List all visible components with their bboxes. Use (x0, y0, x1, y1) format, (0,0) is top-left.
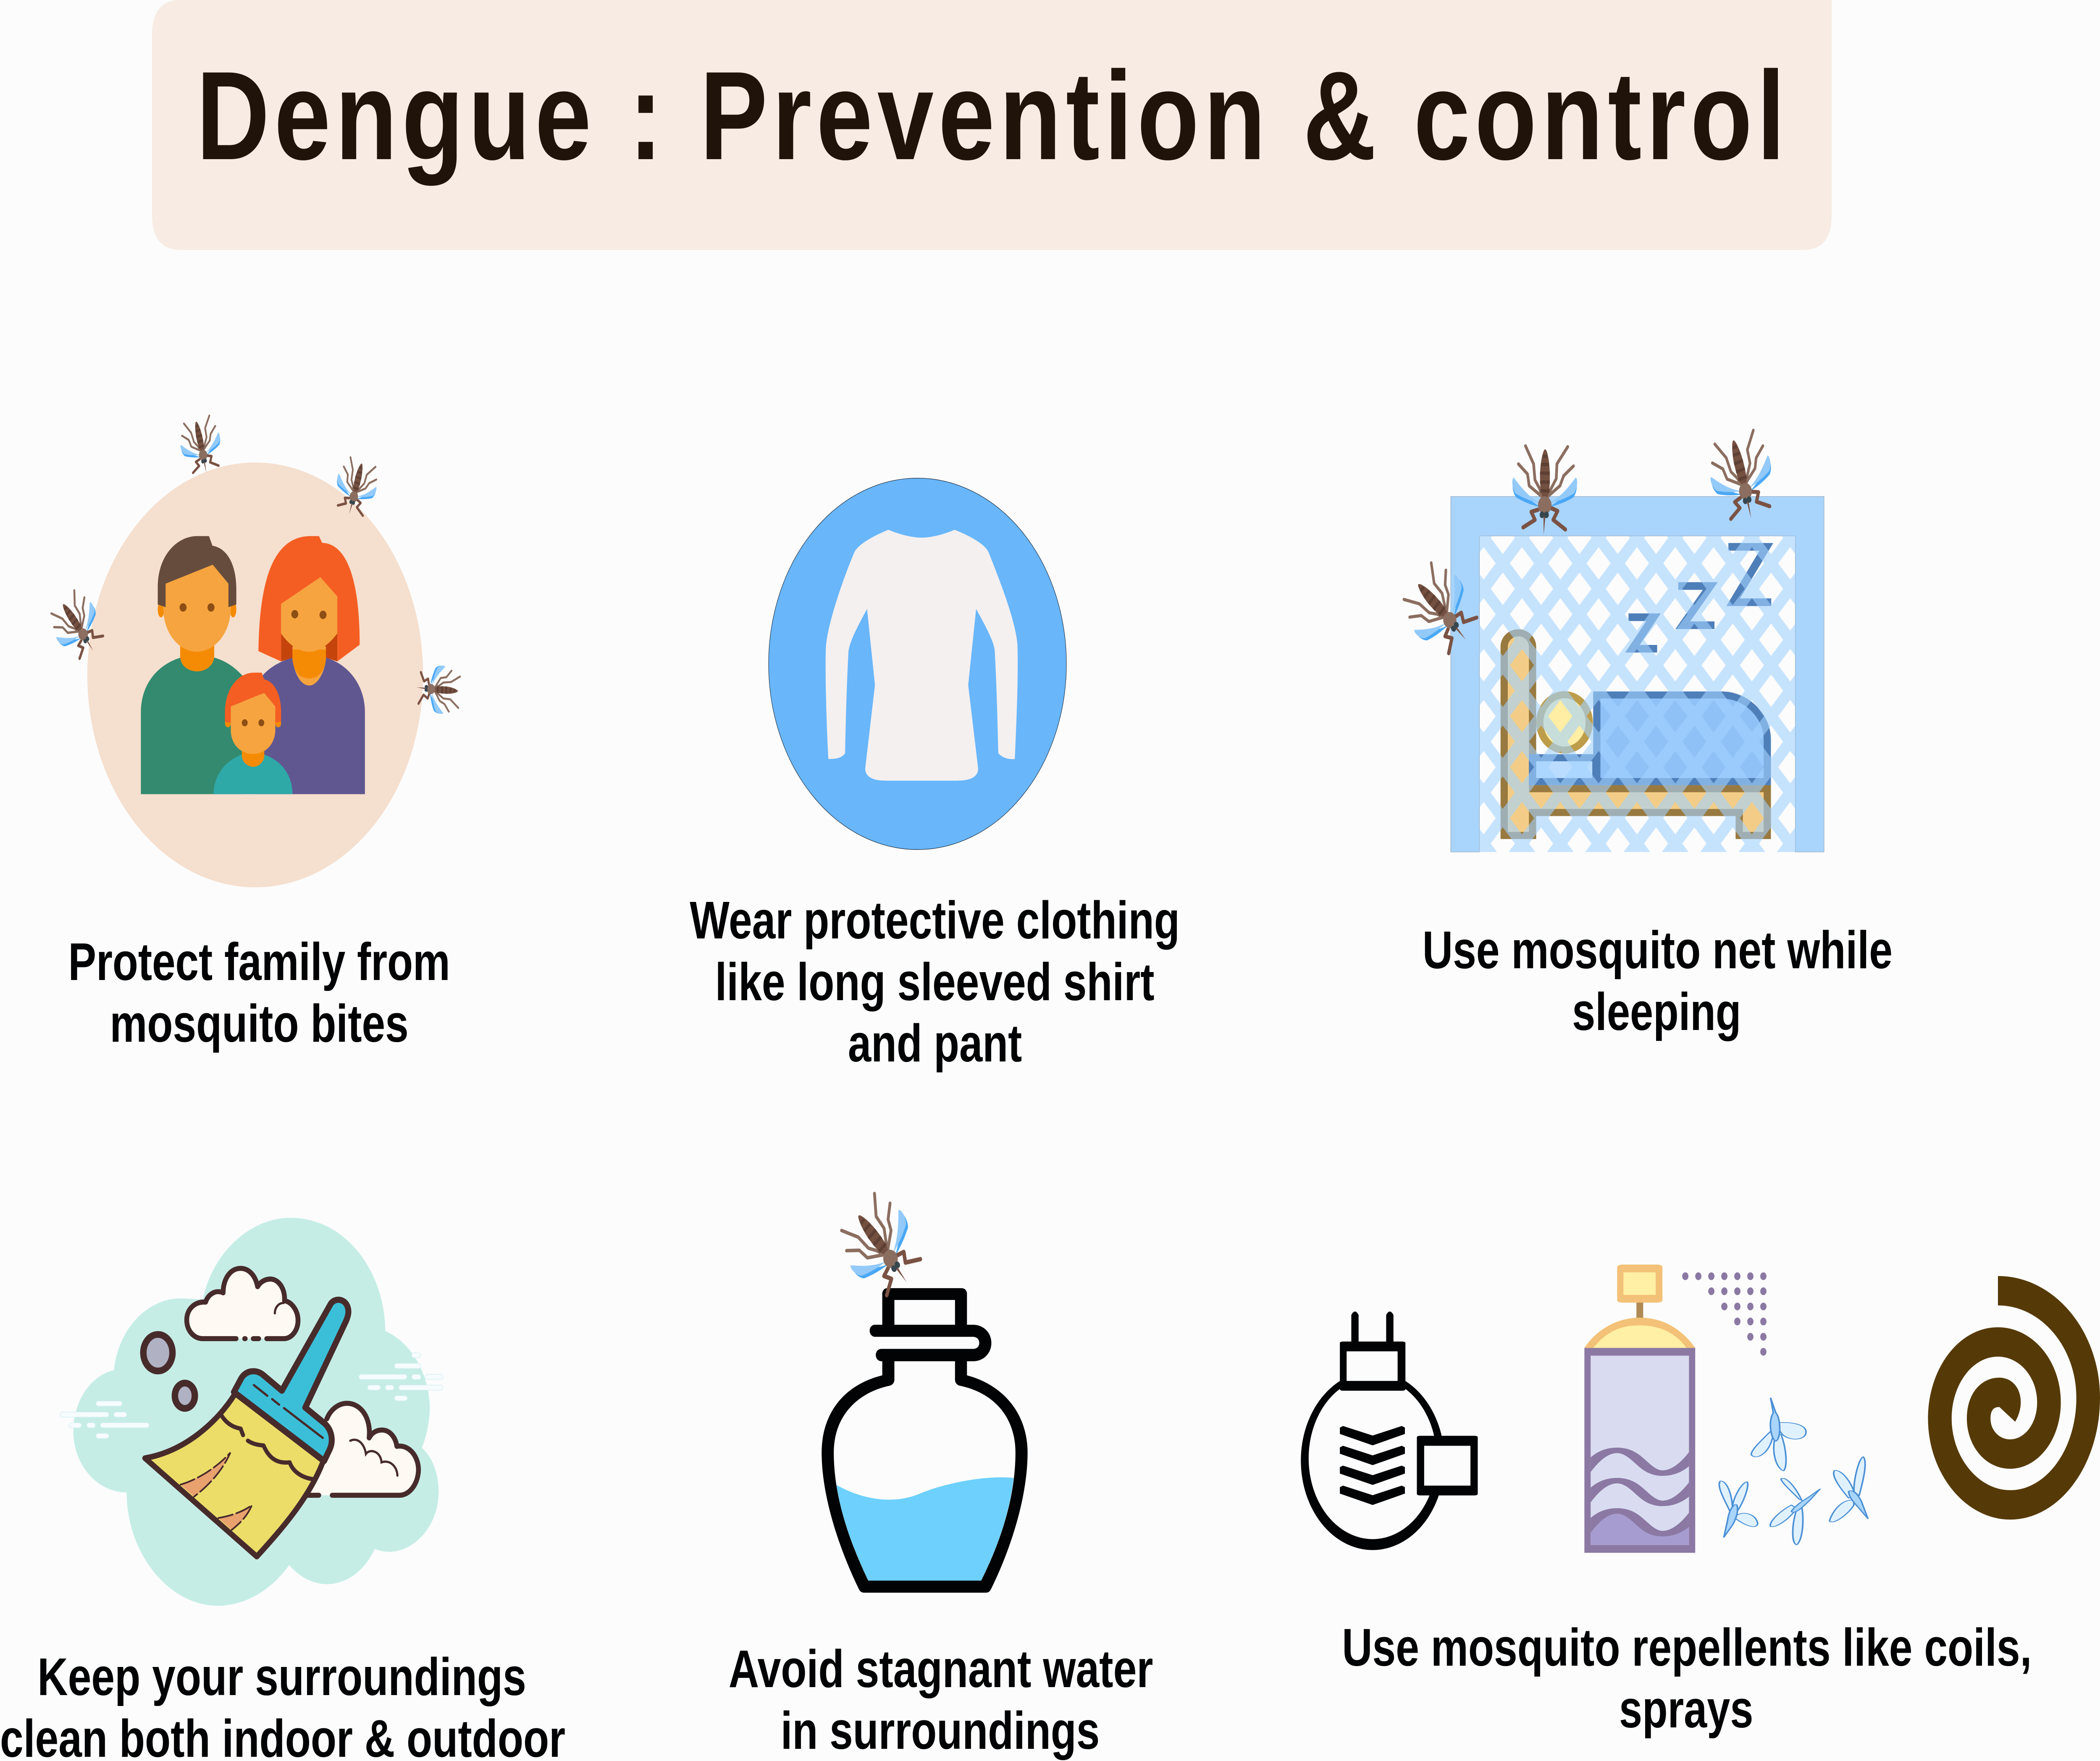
icon: mosquito coil (1940, 1291, 2088, 1505)
icon: mosquito right (416, 664, 460, 715)
icon: water bottle (822, 1288, 1028, 1593)
panel: clean surroundings (0, 1218, 565, 1761)
caption: mosquito net: sleeping (1572, 983, 1741, 1042)
caption: protective clothing: Wear protective clothing (690, 891, 1180, 950)
icon: family (87, 463, 423, 887)
icon: dead mosquitoes (1719, 1398, 1868, 1545)
caption: protective clothing: like long sleeved shirt (715, 953, 1155, 1012)
icon: mosquito on net left (1396, 554, 1487, 667)
caption: mosquito net: Use mosquito net while (1423, 921, 1893, 980)
caption: protective clothing (690, 891, 1180, 1073)
caption: protect family: mosquito bites (110, 994, 409, 1053)
icon: long sleeved shirt (769, 478, 1066, 849)
icon: mosquito on net top (1512, 446, 1577, 535)
title: Dengue : Prevention & control (196, 45, 1785, 187)
panel: protect family (44, 413, 460, 1053)
caption: protective clothing: and pant (848, 1014, 1022, 1073)
title background (152, 0, 1832, 250)
icon: mosquito left (44, 584, 111, 668)
icon: mosquito top right (331, 455, 381, 521)
icon: spray can (1583, 1265, 1695, 1553)
icon: mosquito on net right (1703, 426, 1782, 529)
caption: stagnant water (729, 1640, 1153, 1761)
panel: mosquito net (1396, 426, 1893, 1042)
caption: repellents: sprays (1619, 1680, 1753, 1739)
caption: repellents (1342, 1618, 2032, 1739)
title banner (152, 0, 1832, 250)
caption: protect family (68, 933, 450, 1053)
caption: clean surroundings (0, 1648, 565, 1761)
icon: broom and clouds (60, 1218, 443, 1606)
panel: protective clothing (690, 478, 1180, 1073)
panel: stagnant water (729, 1184, 1153, 1761)
icon: bed under net (1451, 496, 1824, 852)
icon: mosquito top (176, 413, 226, 479)
caption: stagnant water: Avoid stagnant water (729, 1640, 1153, 1699)
caption: mosquito net (1423, 921, 1893, 1042)
icon: mosquito on bottle (832, 1184, 932, 1310)
panel: repellents (1301, 1265, 2088, 1739)
icon: spray droplets (1682, 1272, 1767, 1356)
icon: plug-in repellent (1301, 1311, 1478, 1550)
caption: stagnant water: in surroundings (781, 1701, 1100, 1761)
caption: clean surroundings: Keep your surroundings (37, 1648, 526, 1707)
caption: protect family: Protect family from (68, 933, 450, 992)
caption: repellents: Use mosquito repellents like coils, (1342, 1618, 2032, 1677)
